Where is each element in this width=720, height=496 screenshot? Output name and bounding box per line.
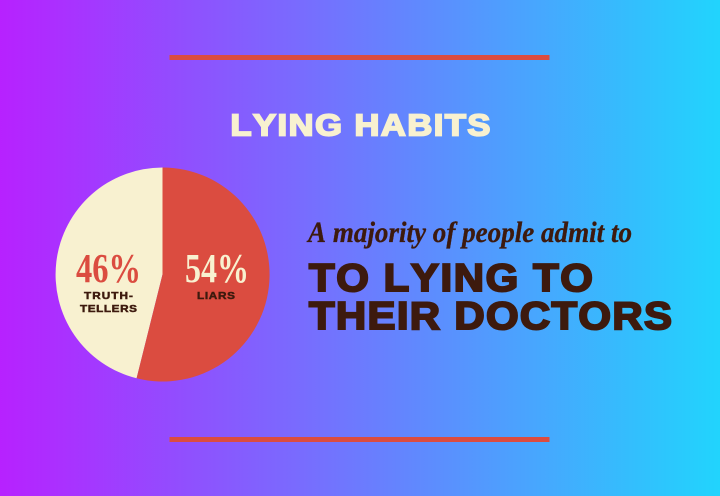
title: LYING HABITS	[230, 108, 490, 142]
pie chart: truth-tellers 46% vs liars 54%	[56, 167, 270, 382]
bottom rule	[170, 437, 550, 442]
label: truth-tellers: TRUTH-	[84, 291, 133, 302]
pie slice: liars	[137, 167, 270, 382]
label: truth-tellers: TELLERS	[80, 304, 137, 315]
main statement: THEIR DOCTORS	[309, 295, 672, 338]
value: 46%: 46%	[76, 245, 141, 291]
pie slice: truth-tellers	[56, 168, 163, 378]
main statement	[309, 257, 672, 338]
label: truth-tellers	[80, 291, 137, 315]
top rule	[170, 55, 550, 60]
value: 54%: 54%	[185, 245, 249, 291]
script subheading: A majority of people admit to	[306, 216, 632, 249]
label: liars: LIARS	[197, 291, 235, 302]
main statement: TO LYING TO	[309, 257, 593, 300]
